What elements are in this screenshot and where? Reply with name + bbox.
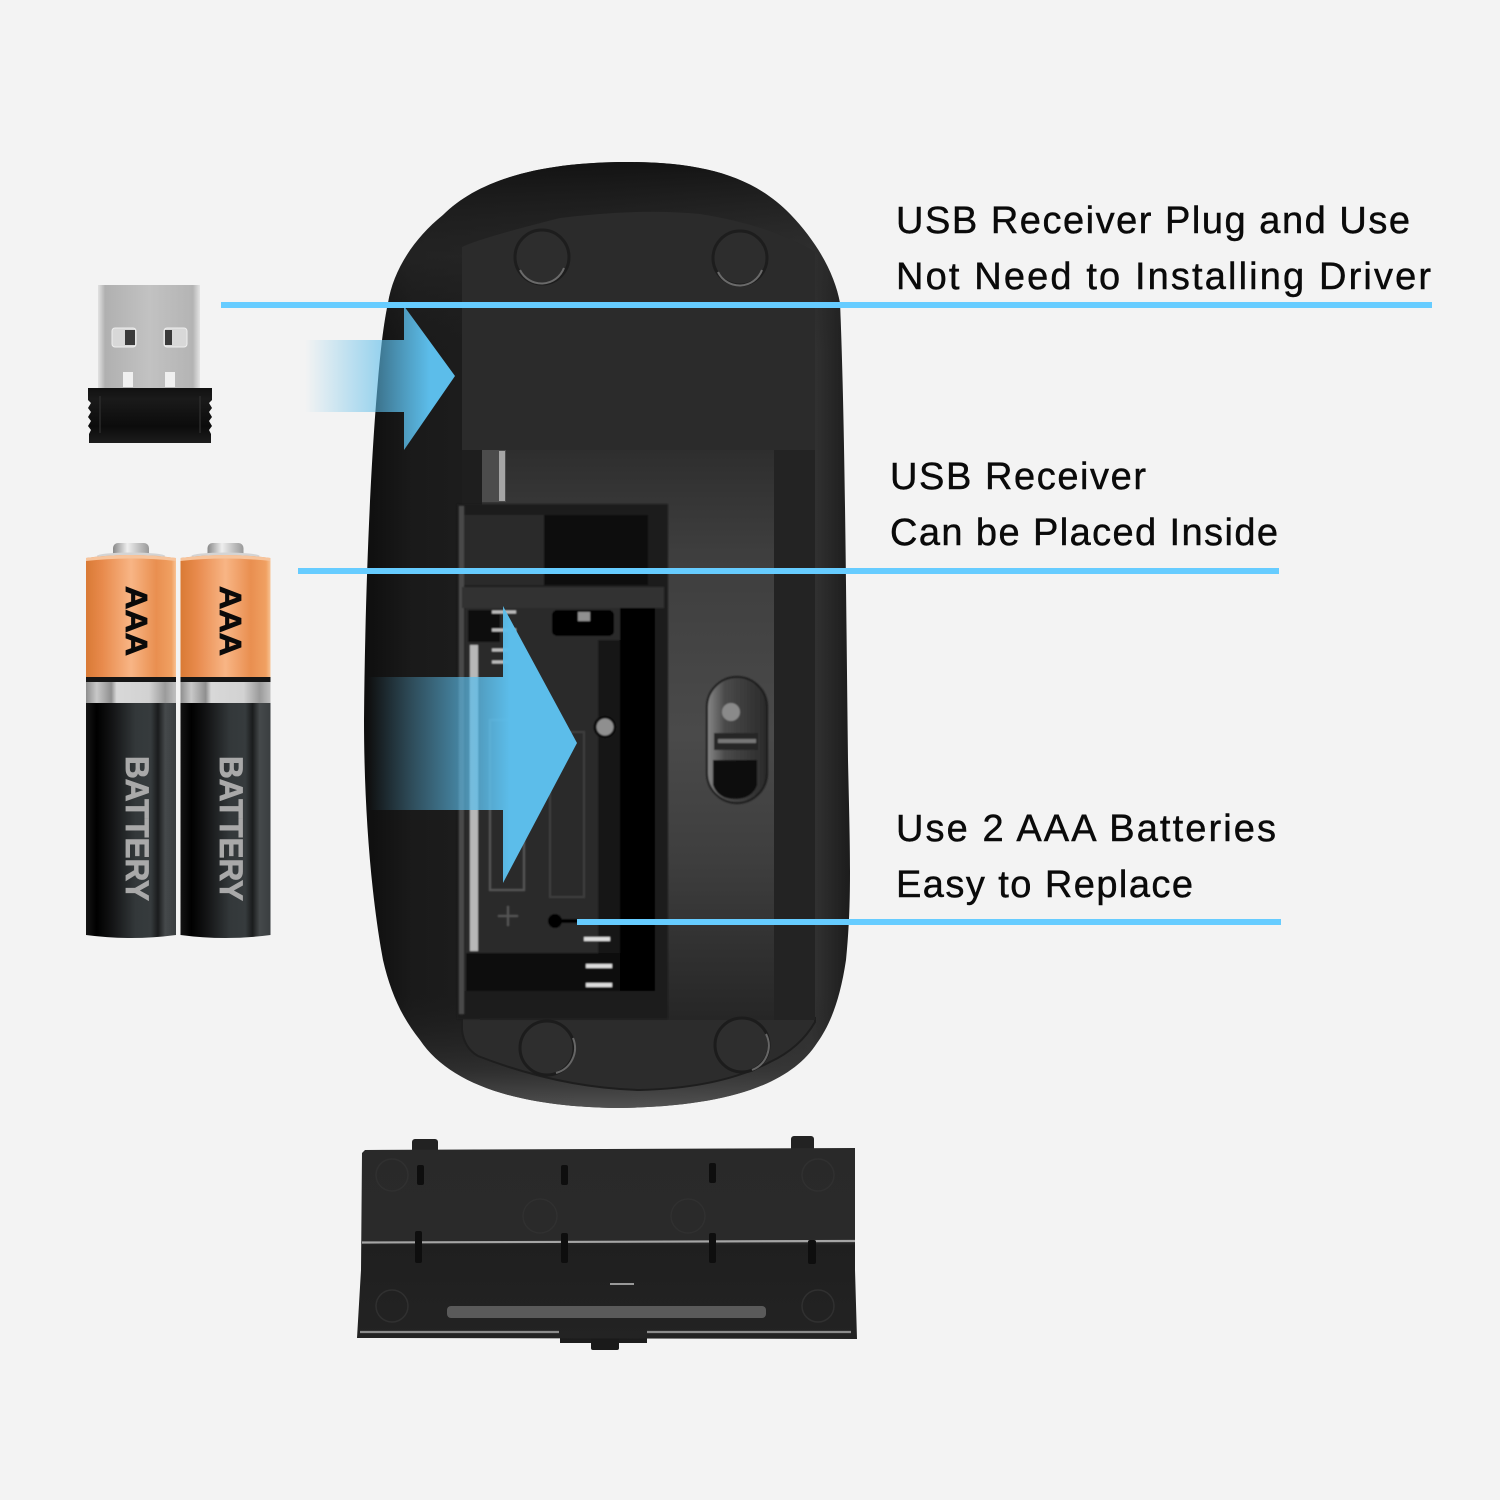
contact glint: [578, 612, 590, 621]
cover small mark: [610, 1283, 634, 1285]
cover pegs: [415, 1163, 816, 1264]
lower bay: [465, 608, 655, 991]
foot: top left: [515, 230, 569, 284]
foot highlight: bottom left: [556, 1038, 575, 1073]
scroll wheel slot: [707, 677, 767, 803]
mouse shell: [364, 162, 850, 1108]
battery compartment: [457, 504, 668, 1019]
text: placed inside: [890, 456, 1278, 554]
bottom spring: [584, 939, 612, 985]
silver strip: [470, 645, 478, 951]
shadow channel: [598, 640, 620, 953]
cover seam: [362, 1241, 855, 1242]
callout line: batteries: [577, 919, 1281, 925]
moulded label: [550, 732, 584, 897]
right side strip: [773, 450, 815, 1020]
foot highlight: top right: [718, 270, 762, 285]
cross bar: [462, 587, 664, 608]
cover tab bottom wide: [560, 1330, 647, 1343]
battery body: [86, 543, 176, 938]
cover tab left: [412, 1139, 438, 1155]
middle panel: [480, 450, 774, 1020]
USB black housing: [88, 388, 212, 443]
lower bay floor: [466, 953, 620, 991]
post next to compartment: [482, 450, 506, 502]
USB left hole: [112, 328, 136, 347]
sensor dot: [722, 703, 740, 721]
cover bottom edge: [360, 1331, 851, 1333]
text: placed inside: Can be Placed Inside: [890, 512, 1278, 554]
plus mark: [498, 906, 518, 926]
cover moulded circles: [376, 1159, 834, 1322]
wheel glint: [718, 739, 756, 743]
top left contact: [468, 610, 500, 642]
wheel strip: [714, 733, 758, 750]
compartment frame: [457, 504, 668, 1019]
text: batteries: [896, 808, 1276, 906]
compartment rim: [459, 506, 464, 1014]
battery body: [180, 543, 270, 938]
text: plug and use: Not Need to Installing Driver: [896, 256, 1431, 298]
arrow: batteries into mouse: [368, 606, 577, 883]
contact dot: [548, 914, 562, 928]
upper bay: [464, 515, 648, 585]
cover tab bottom centre: [591, 1336, 619, 1350]
contact stem: [555, 919, 579, 923]
slot body: [707, 677, 767, 803]
left side strip: [462, 450, 482, 505]
black wall: [620, 608, 655, 991]
USB left hole shadow: [125, 330, 135, 345]
upper base plate: [462, 212, 815, 450]
arrow: USB receiver into mouse: [305, 306, 455, 450]
text: placed inside: USB Receiver: [890, 456, 1146, 498]
top spring: [492, 612, 516, 662]
foot: top right: [713, 231, 767, 285]
BATTERY label: BATTERY: [213, 756, 249, 901]
foot highlight: bottom right: [752, 1034, 769, 1070]
foot: bottom right: [715, 1018, 769, 1072]
AAA label: AAA: [119, 586, 154, 656]
USB housing grooves: [100, 396, 200, 433]
callout line: plug and use: [221, 302, 1432, 308]
USB right hole shadow: [165, 330, 172, 345]
cover tab right: [791, 1136, 814, 1154]
AAA battery right: [180, 543, 270, 938]
text: batteries: Use 2 AAA Batteries: [896, 808, 1276, 850]
foot: bottom left: [520, 1021, 574, 1075]
text: plug and use: [896, 200, 1431, 298]
AAA battery left: [86, 543, 176, 938]
cover plate: [357, 1148, 857, 1339]
top contact block: [552, 610, 614, 636]
wheel opening: [713, 760, 757, 799]
moulded slot: [490, 720, 524, 890]
AAA label: AAA: [213, 586, 248, 656]
USB receiver: [88, 285, 212, 443]
USB metal plug: [98, 285, 200, 388]
upper bay grey part: [464, 515, 544, 585]
cover grip bar: [447, 1306, 766, 1318]
lower base plate: [462, 1018, 815, 1090]
USB right notch: [165, 372, 175, 387]
BATTERY label: BATTERY: [119, 756, 155, 901]
callout line: placed inside: [298, 568, 1279, 574]
USB right hole: [164, 328, 187, 347]
shell shading: [364, 162, 850, 1108]
mouse underside: [364, 162, 850, 1108]
USB left notch: [123, 372, 133, 387]
screw: [595, 717, 615, 737]
foot highlight: top left: [520, 268, 564, 283]
battery cover: [357, 1136, 857, 1350]
text: plug and use: USB Receiver Plug and Use: [896, 200, 1410, 242]
post highlight: [499, 451, 505, 501]
text: batteries: Easy to Replace: [896, 864, 1193, 906]
